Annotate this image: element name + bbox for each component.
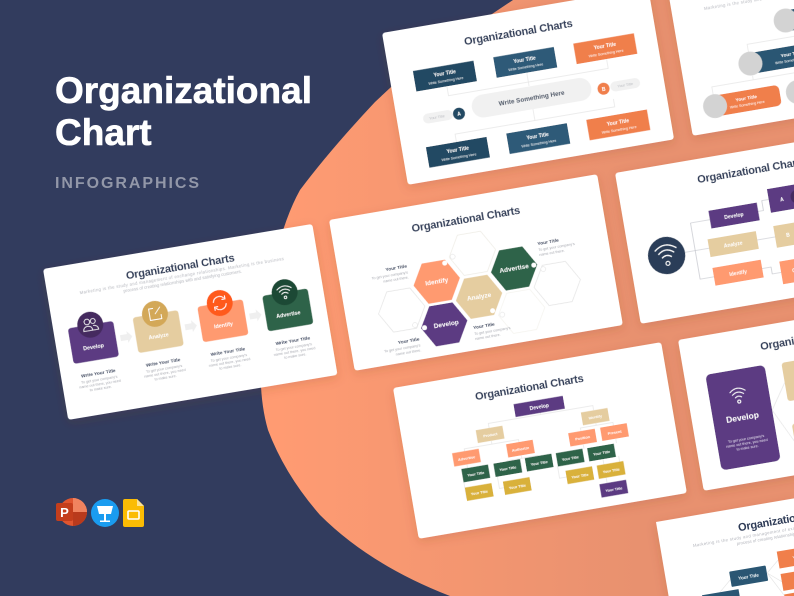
row: second orange pill (784, 68, 794, 106)
icon: people (82, 317, 99, 332)
text: step 3: to make sure. (219, 363, 242, 371)
slide title: Organizational Charts (474, 373, 585, 403)
text: step 3: Write Your Title (210, 346, 246, 358)
box: bottom middle: Your Title (526, 132, 550, 142)
hexagon: Analyze: Analyze (466, 292, 492, 303)
outline hexagon: bottom (495, 287, 548, 335)
step: Identify (195, 286, 249, 342)
box: orange 2 (781, 566, 794, 591)
yellow box 4 (597, 461, 626, 479)
panel: top right rows slide (667, 0, 794, 136)
yellow box 2: Your Title (509, 484, 526, 490)
green box 3: Your Title (531, 460, 548, 467)
box: A: A (780, 197, 785, 204)
green box 1 (461, 464, 490, 482)
outline hexagon: top (446, 229, 499, 277)
text: step 1: to make sure. (89, 385, 112, 392)
connector lines (454, 401, 624, 513)
label: upper right (537, 235, 576, 257)
box: orange 1 (777, 543, 794, 568)
tag A (422, 107, 466, 126)
label: lower middle (473, 319, 512, 341)
hexagon: Develop: Develop (433, 319, 459, 330)
text: step 2 (142, 357, 187, 383)
yellow box 3 (565, 466, 594, 484)
row: orange pill: Your Title (735, 94, 758, 104)
row: navy pill (737, 38, 794, 77)
green box 2: Your Title (499, 465, 517, 472)
text: step 4: To get your company's (275, 342, 312, 352)
panel: card slide (678, 294, 794, 491)
text: step 3: name out there, you need (209, 357, 251, 368)
box: Product: Product (483, 432, 498, 438)
box: Develop: Develop (529, 403, 549, 412)
step: Develop (66, 308, 119, 364)
yellow box 3: Your Title (571, 473, 589, 480)
connector lines (715, 560, 784, 596)
outline hexagon: right (531, 259, 584, 307)
box: navy Your Title: Your Title (738, 572, 760, 581)
green box 2 (493, 459, 522, 477)
box: Analyze: Analyze (724, 241, 743, 250)
card heading: Develop (725, 410, 760, 425)
icon: edit (148, 307, 162, 320)
card text: To get your company's (728, 434, 765, 444)
box: navy lower (702, 589, 740, 596)
box: bottom middle (506, 123, 570, 154)
box: top left: Write Something Here (428, 76, 464, 86)
tag B: B (601, 86, 606, 93)
box: Present: Present (608, 430, 623, 436)
box: top left (413, 61, 477, 92)
box: top right (573, 33, 637, 64)
panel: process slide (43, 224, 338, 420)
box: orange 3 (784, 593, 794, 596)
box: top left: Your Title (433, 69, 457, 79)
label: upper right: name out there. (539, 249, 565, 257)
green box 1: Your Title (467, 471, 485, 478)
box: Identify (712, 260, 764, 286)
tag A: A (457, 111, 462, 118)
icon: wifi (729, 387, 747, 404)
connector lines (768, 383, 794, 445)
box: Position: Position (575, 435, 591, 441)
box: Identify: Identify (588, 414, 603, 420)
connector lines (447, 60, 616, 142)
box: bottom right: Write Something Here (601, 125, 637, 135)
panel: org chart top slide (382, 0, 674, 185)
row: orange pill: Write Something Here (730, 100, 765, 110)
card text: to make sure. (736, 444, 759, 452)
yellow box 4: Your Title (602, 467, 620, 474)
card text (725, 433, 769, 453)
text: step 1: To get your company's (81, 375, 118, 385)
label: upper left: To get your company's (371, 270, 408, 281)
text: step 1 (77, 367, 122, 394)
label: lower left: To get your company's (384, 343, 421, 354)
hexagon: Advertise: Advertise (499, 263, 530, 275)
label: lower left (383, 336, 422, 358)
green box 3 (525, 454, 554, 472)
box: bottom left: Write Something Here (441, 152, 477, 162)
icon: refresh (213, 295, 227, 311)
box: Product (476, 426, 505, 443)
box: upper beige (781, 354, 794, 401)
green box 4 (556, 449, 585, 467)
box: Develop (708, 203, 760, 229)
panel: hexagon slide (329, 174, 623, 371)
peach blob (261, 0, 794, 596)
icon: PowerPoint: P (60, 505, 69, 520)
panel: tree chart slide (393, 342, 687, 539)
box: bottom right (586, 109, 650, 140)
label: lower middle: To get your company's (474, 326, 511, 336)
box: Authorize: Authorize (512, 446, 530, 453)
hexagon: Identify: Identify (425, 277, 449, 288)
wifi circle (645, 234, 688, 277)
label: upper right: Your Title (537, 238, 560, 247)
label: upper right: To get your company's (538, 242, 575, 252)
label: lower left: name out there. (395, 348, 422, 357)
text: step 3 (207, 346, 251, 372)
hexagon: Advertise (488, 244, 541, 293)
connector lines (706, 31, 794, 95)
green box 5 (587, 444, 616, 461)
tag A: Your Title (429, 114, 445, 121)
green box 5: Your Title (593, 450, 610, 457)
icon: wifi (276, 285, 293, 300)
text: step 4: to make sure. (284, 352, 307, 360)
purple box: Your Title (605, 486, 623, 493)
yellow box 1 (465, 483, 494, 501)
step: Analyze: Analyze (148, 332, 169, 341)
center pill (470, 76, 593, 119)
box: bottom left (426, 137, 490, 168)
label: lower middle: Your Title (473, 322, 495, 331)
text: step 2: name out there, you need (144, 368, 186, 379)
label: lower left: Your Title (398, 336, 420, 346)
card text: name out there, you need (726, 438, 768, 449)
label: upper left: name out there. (383, 275, 409, 284)
box: Position (568, 429, 597, 447)
slide title: Organizational Charts (463, 18, 574, 48)
purple box (599, 480, 628, 498)
text: step 2: To get your company's (146, 364, 183, 374)
box: Identify (581, 408, 610, 425)
text: step 3: To get your company's (210, 353, 248, 363)
box: top right: Write Something Here (588, 49, 624, 58)
box: top middle (493, 47, 557, 78)
connector lines (679, 199, 781, 288)
box: Analyze (708, 231, 759, 257)
box: Identify: Identify (729, 269, 748, 278)
box: top right: Your Title (593, 42, 617, 51)
box: bottom left: Your Title (446, 145, 470, 155)
text: step 4 (272, 335, 316, 361)
tag B: Your Title (617, 82, 633, 89)
step: Advertise: Advertise (276, 310, 301, 320)
slide title: Organizational Charts (411, 205, 521, 235)
box: Authorize (506, 440, 535, 458)
step: Advertise (260, 276, 313, 332)
label: upper left: Your Title (385, 264, 408, 273)
text: step 1: name out there, you need (79, 379, 121, 390)
text: step 2: to make sure. (154, 374, 177, 382)
label: lower middle: name out there. (475, 333, 501, 341)
box: Advertise (452, 449, 481, 467)
box: navy Your Title (729, 565, 768, 587)
yellow box 2 (503, 477, 532, 495)
box: B: B (786, 232, 791, 239)
label: upper left (370, 264, 409, 286)
arrows (119, 309, 263, 344)
step: Analyze (130, 297, 184, 353)
row: upper navy pill (772, 0, 794, 34)
text: step 4: Write Your Title (275, 335, 311, 347)
hexagon: Identify (410, 258, 463, 306)
panel: wifi tree slide (615, 127, 794, 324)
step: Identify: Identify (214, 321, 234, 331)
main title: Organizational (55, 70, 312, 111)
box: bottom middle: Write Something Here (521, 139, 557, 149)
purple card (705, 365, 781, 471)
icon: Google Slides (123, 499, 144, 527)
box: Develop (513, 396, 565, 417)
main title second line: Chart (55, 112, 152, 153)
box: Develop: Develop (724, 212, 744, 221)
slide description: process of creating relationships with and satisfying customers. (123, 269, 242, 294)
green box 4: Your Title (562, 455, 579, 462)
box: A (767, 180, 794, 213)
text: step 4: name out there, you need (274, 346, 316, 357)
tag B (597, 77, 641, 96)
icon: PowerPoint (56, 498, 87, 526)
step: Develop: Develop (83, 343, 105, 352)
text: step 2: Write Your Title (145, 357, 181, 369)
slide description: Marketing is the study and management of exchange relationships. Marketing is the business (79, 256, 284, 295)
hexagon: Develop (418, 300, 471, 348)
outline hexagon: left (375, 286, 428, 334)
center pill: Write Something Here (498, 90, 566, 108)
hexagon: Analyze (452, 273, 506, 321)
subtitle: INFOGRAPHICS (55, 175, 199, 192)
row: orange pill (701, 83, 782, 120)
yellow box 1: Your Title (471, 490, 488, 496)
box: top middle: Write Something Here (508, 62, 544, 72)
box: Present (600, 423, 629, 441)
icon: Keynote (91, 499, 119, 527)
box: lower beige (792, 416, 794, 462)
box: top middle: Your Title (513, 55, 536, 65)
box: Advertise: Advertise (458, 455, 475, 462)
text: step 1: Write Your Title (81, 368, 116, 380)
box: B (773, 217, 794, 248)
box: C (779, 252, 794, 284)
panel: lower right slide (656, 498, 794, 596)
box: bottom right: Your Title (606, 118, 630, 128)
slide title: Organizational Charts (125, 252, 236, 282)
